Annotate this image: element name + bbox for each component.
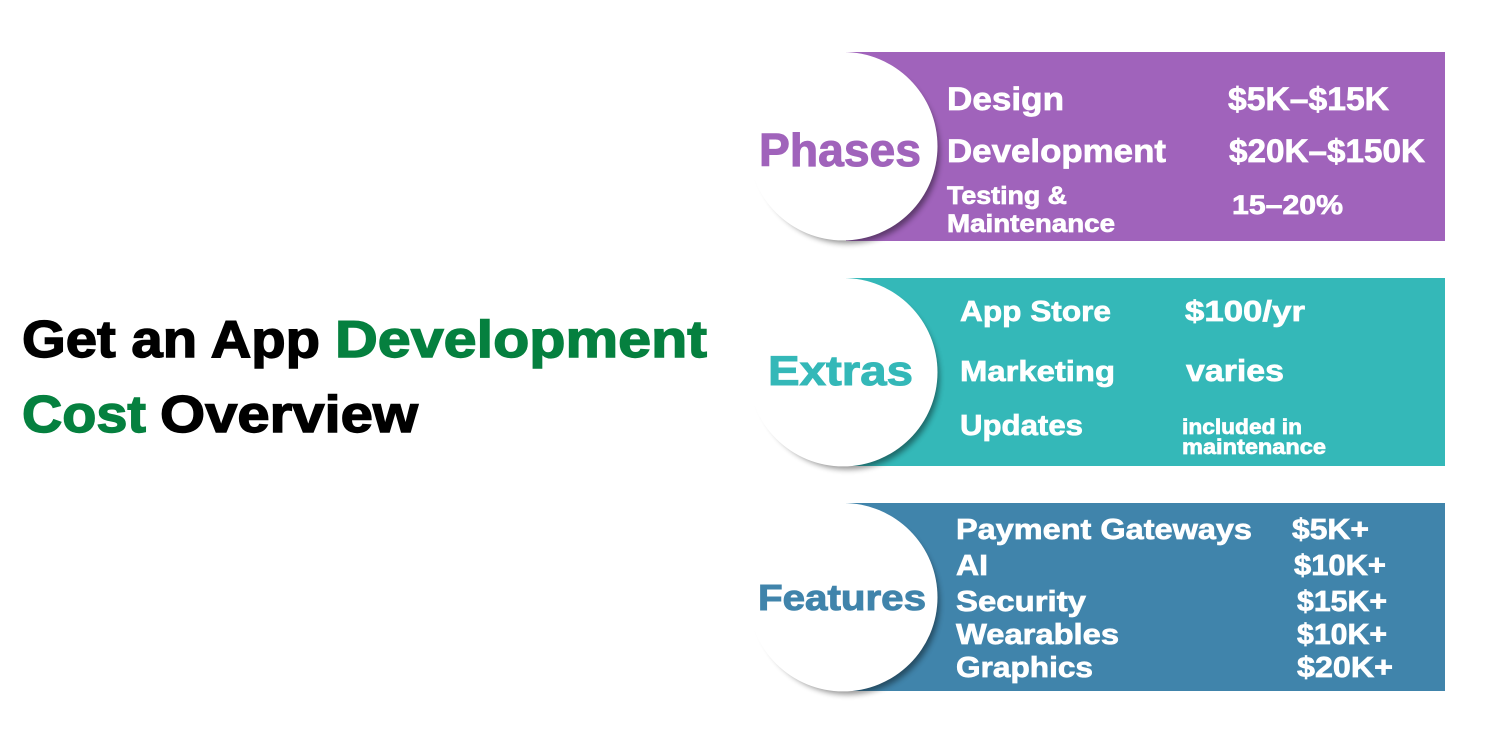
phases rows: Maintenance <box>947 210 1115 238</box>
extras rows: $100/yr <box>1185 296 1305 328</box>
extras banner <box>846 278 1445 466</box>
features rows: $15K+ <box>1297 586 1387 618</box>
features rows: $10K+ <box>1297 619 1387 651</box>
extras circle shadow <box>756 286 940 470</box>
features circle shadow <box>756 512 940 694</box>
title: Overview <box>160 386 419 444</box>
extras rows: included in <box>1182 416 1302 439</box>
title: Get an App <box>22 311 320 369</box>
panel: phases <box>748 52 1445 244</box>
phases banner <box>846 52 1445 241</box>
phases heading: Phases <box>759 124 921 176</box>
features rows: Wearables <box>956 619 1119 651</box>
extras heading: Extras <box>768 347 913 394</box>
features rows <box>956 514 1393 684</box>
features rows: $10K+ <box>1294 550 1386 582</box>
extras rows: maintenance <box>1182 436 1326 459</box>
features rows: Graphics <box>956 652 1093 684</box>
features heading: Features <box>758 577 926 618</box>
extras rows <box>960 296 1326 459</box>
phases rows: Testing & <box>947 182 1067 210</box>
features rows: Security <box>956 586 1086 618</box>
features rows: $5K+ <box>1292 514 1369 546</box>
title <box>22 311 707 444</box>
phases rows: $20K–$150K <box>1229 133 1425 169</box>
features rows: AI <box>956 550 988 582</box>
features banner <box>846 503 1445 691</box>
phases rows: $5K–$15K <box>1228 81 1389 117</box>
phases circle <box>748 52 938 240</box>
extras rows: App Store <box>960 296 1111 328</box>
extras circle <box>748 278 938 466</box>
title: Cost <box>22 386 146 444</box>
extras rows: Marketing <box>960 356 1115 388</box>
title: Development <box>335 311 707 369</box>
phases circle shadow <box>756 60 940 244</box>
features rows: Payment Gateways <box>956 514 1252 546</box>
features circle <box>748 503 938 691</box>
phases rows: 15–20% <box>1232 190 1343 220</box>
panel: features <box>748 503 1445 694</box>
features rows: $20K+ <box>1297 652 1393 684</box>
phases rows: Design <box>947 81 1064 117</box>
extras rows: varies <box>1186 353 1284 388</box>
phases rows <box>947 81 1425 238</box>
panel: extras <box>748 278 1445 470</box>
extras rows: Updates <box>960 410 1083 442</box>
phases rows: Development <box>947 133 1166 169</box>
